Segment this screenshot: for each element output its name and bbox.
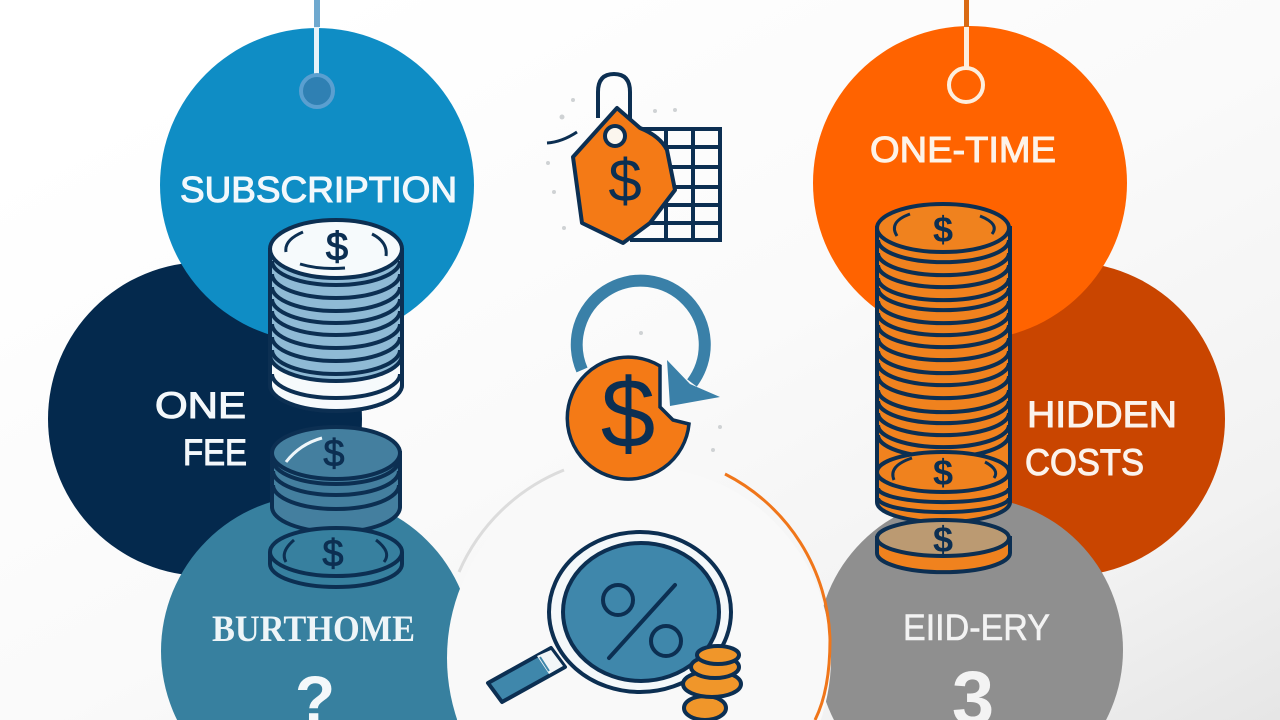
tag body [573, 108, 675, 243]
label: subscription: SUBSCRIPTION [180, 169, 457, 210]
label: coin dollars right: $ [933, 209, 953, 250]
panel: burthome circle [161, 495, 473, 720]
panel: hidden costs circle [911, 262, 1225, 576]
coin [567, 357, 689, 479]
table grid [630, 129, 720, 240]
label: one fee: ONE [155, 385, 246, 426]
panel: every circle [817, 497, 1123, 720]
panel: subscription circle [160, 0, 474, 342]
connector: subscription pin [301, 0, 333, 107]
label: one fee: FEE [183, 432, 247, 473]
coin stack: subscription [270, 220, 402, 411]
label: coin dollars right: $ [933, 519, 953, 560]
label: one fee [155, 385, 247, 473]
panel: one-time circle [813, 0, 1127, 340]
label: coin dollars lower: $ [323, 433, 345, 475]
arc: gray [459, 470, 564, 572]
tag dollar: $ [608, 147, 642, 214]
label: coin dollar top: $ [326, 225, 348, 269]
label: hidden costs [1025, 394, 1177, 483]
decorative specks [546, 98, 722, 452]
tag loop [598, 74, 630, 122]
panel: center magnifier circle [447, 466, 831, 720]
connector: one-time pin [949, 0, 983, 102]
coin dollar: $ [601, 358, 655, 468]
coin stack: one-time [877, 204, 1010, 572]
arrow [577, 281, 705, 383]
label: coin dollars lower [322, 433, 345, 575]
label: coin dollars right [933, 209, 953, 560]
coin stack: burthome upper [270, 427, 402, 587]
label: burthome: BURTHOME [212, 609, 415, 650]
label: coin dollars right: $ [933, 452, 953, 493]
arc: orange [725, 474, 830, 720]
label: every: EIID-ERY [903, 607, 1050, 648]
icon: price tag with table [547, 74, 720, 243]
icon: small coin pile [683, 646, 741, 720]
label: hidden costs: COSTS [1025, 442, 1144, 483]
label: coin dollars lower: $ [322, 533, 344, 575]
label: hidden costs: HIDDEN [1027, 394, 1177, 435]
panel: one fee circle [48, 262, 362, 576]
label: one-time: ONE-TIME [870, 129, 1056, 170]
icon: dollar coin with circular arrow [567, 281, 720, 479]
icon: magnifier with percent [488, 532, 731, 702]
